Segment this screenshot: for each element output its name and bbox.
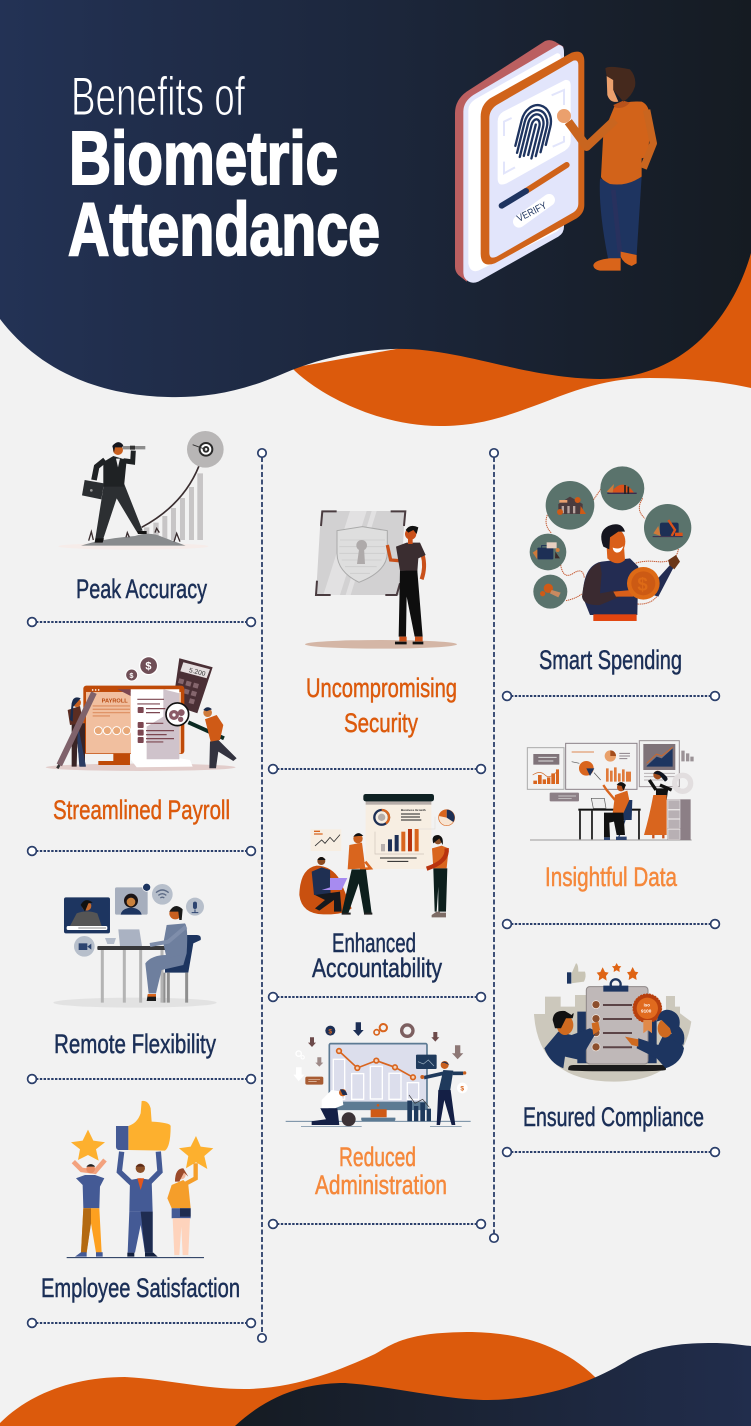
icon: insightful data <box>527 741 694 840</box>
icon: ensured compliance: iso <box>644 1003 650 1008</box>
heading: Uncompromising Security: Uncompromising <box>306 673 457 703</box>
title: Attendance <box>68 187 380 271</box>
heading: Peak Accuracy: Peak Accuracy <box>76 574 207 604</box>
heading: Enhanced Accountability <box>312 928 442 983</box>
icon: streamlined payroll: $ <box>145 661 151 673</box>
heading: Employee Satisfaction: Employee Satisfaction <box>41 1273 240 1303</box>
title: Biometric <box>69 116 338 200</box>
icon: smart spending: $ <box>637 574 648 595</box>
heading: Insightful Data: Insightful Data <box>545 862 678 892</box>
footer orange wave <box>0 1332 600 1426</box>
mini icons in circles <box>533 484 683 597</box>
title <box>68 65 380 271</box>
heading: Remote Flexibility: Remote Flexibility <box>54 1029 216 1059</box>
icon: reduced administration: $ <box>460 1085 464 1092</box>
icon: smart spending <box>530 466 691 621</box>
icon: fingerprint tablet with man: VERIFY <box>515 200 549 225</box>
icon: ensured compliance <box>534 963 691 1082</box>
icon: fingerprint <box>513 102 555 162</box>
icon: ensured compliance: 9100 <box>641 1009 652 1014</box>
heading: Reduced Administration <box>315 1142 447 1200</box>
icon: remote flexibility <box>53 883 217 1008</box>
icon: streamlined payroll <box>46 656 237 771</box>
man <box>600 177 642 260</box>
icon: streamlined payroll: $ <box>129 671 133 680</box>
heading: Smart Spending: Smart Spending <box>539 645 682 675</box>
header orange wave <box>292 240 751 426</box>
heading: Uncompromising Security <box>306 673 457 738</box>
heading: Streamlined Payroll: Streamlined Payroll <box>53 795 230 825</box>
heading: Enhanced Accountability: Accountability <box>312 953 442 983</box>
heading: Reduced Administration: Reduced <box>339 1142 416 1172</box>
icon: employee satisfaction <box>67 1101 213 1258</box>
icon: fingerprint tablet with man <box>455 40 653 283</box>
heading: Reduced Administration: Administration <box>315 1170 447 1200</box>
icon: uncompromising security <box>305 511 457 649</box>
icon: reduced administration: $ <box>328 1028 332 1035</box>
title: Benefits of <box>71 65 245 127</box>
header dark wave <box>0 0 751 397</box>
icon: peak accuracy <box>58 431 224 550</box>
icon: streamlined payroll: PAYROLL <box>102 699 128 705</box>
icon: enhanced accountability: Business Growth <box>401 808 426 812</box>
icon: reduced administration <box>286 1022 471 1126</box>
heading: Uncompromising Security: Security <box>344 708 418 738</box>
footer dark wave <box>235 1343 751 1426</box>
connector lines <box>28 449 719 1342</box>
heading: Enhanced Accountability: Enhanced <box>332 928 416 958</box>
icon: enhanced accountability <box>299 794 455 917</box>
icon: streamlined payroll: 5.200 <box>188 667 206 678</box>
